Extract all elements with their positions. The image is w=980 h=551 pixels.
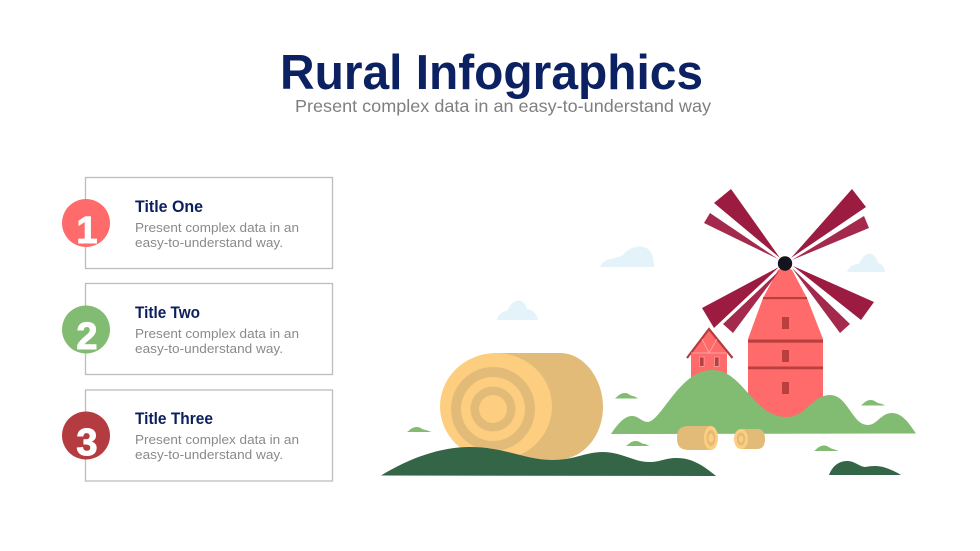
heading: title two: Title Two [135, 304, 200, 322]
icon: clouds [497, 246, 885, 320]
icon: grass tufts [407, 393, 885, 451]
title: Rural Infographics [280, 46, 703, 100]
text block: title one: Present complex data in an [135, 220, 299, 235]
panel: title one [62, 178, 332, 268]
icon: large hay bale [440, 353, 603, 460]
icon: green hills [611, 370, 916, 434]
panel: title two [62, 284, 332, 374]
icon: small hay bales [677, 426, 765, 450]
subtitle: Present complex data in an easy-to-understand way [295, 96, 711, 116]
icon: windmill blades [702, 189, 874, 333]
heading: title one: Title One [135, 198, 203, 216]
number badge 1 [62, 199, 110, 252]
icon: windmill tower [748, 266, 823, 425]
icon: dark green foreground hill [381, 447, 716, 476]
text block: title two: easy-to-understand way. [135, 341, 283, 356]
number badge 3: 3 [76, 422, 98, 464]
text block: title three: easy-to-understand way. [135, 447, 283, 462]
number badge 2 [62, 306, 110, 358]
icon: dark green bush [829, 461, 901, 475]
number badge 2: 2 [76, 316, 98, 358]
text block: title one: easy-to-understand way. [135, 235, 283, 250]
text block: title two: Present complex data in an [135, 326, 299, 341]
panel: title three [62, 390, 332, 481]
number badge 1: 1 [76, 210, 98, 252]
number badge 3 [62, 412, 110, 464]
icon: barn [687, 329, 732, 392]
heading: title three: Title Three [135, 410, 213, 428]
text block: title three: Present complex data in an [135, 432, 299, 447]
